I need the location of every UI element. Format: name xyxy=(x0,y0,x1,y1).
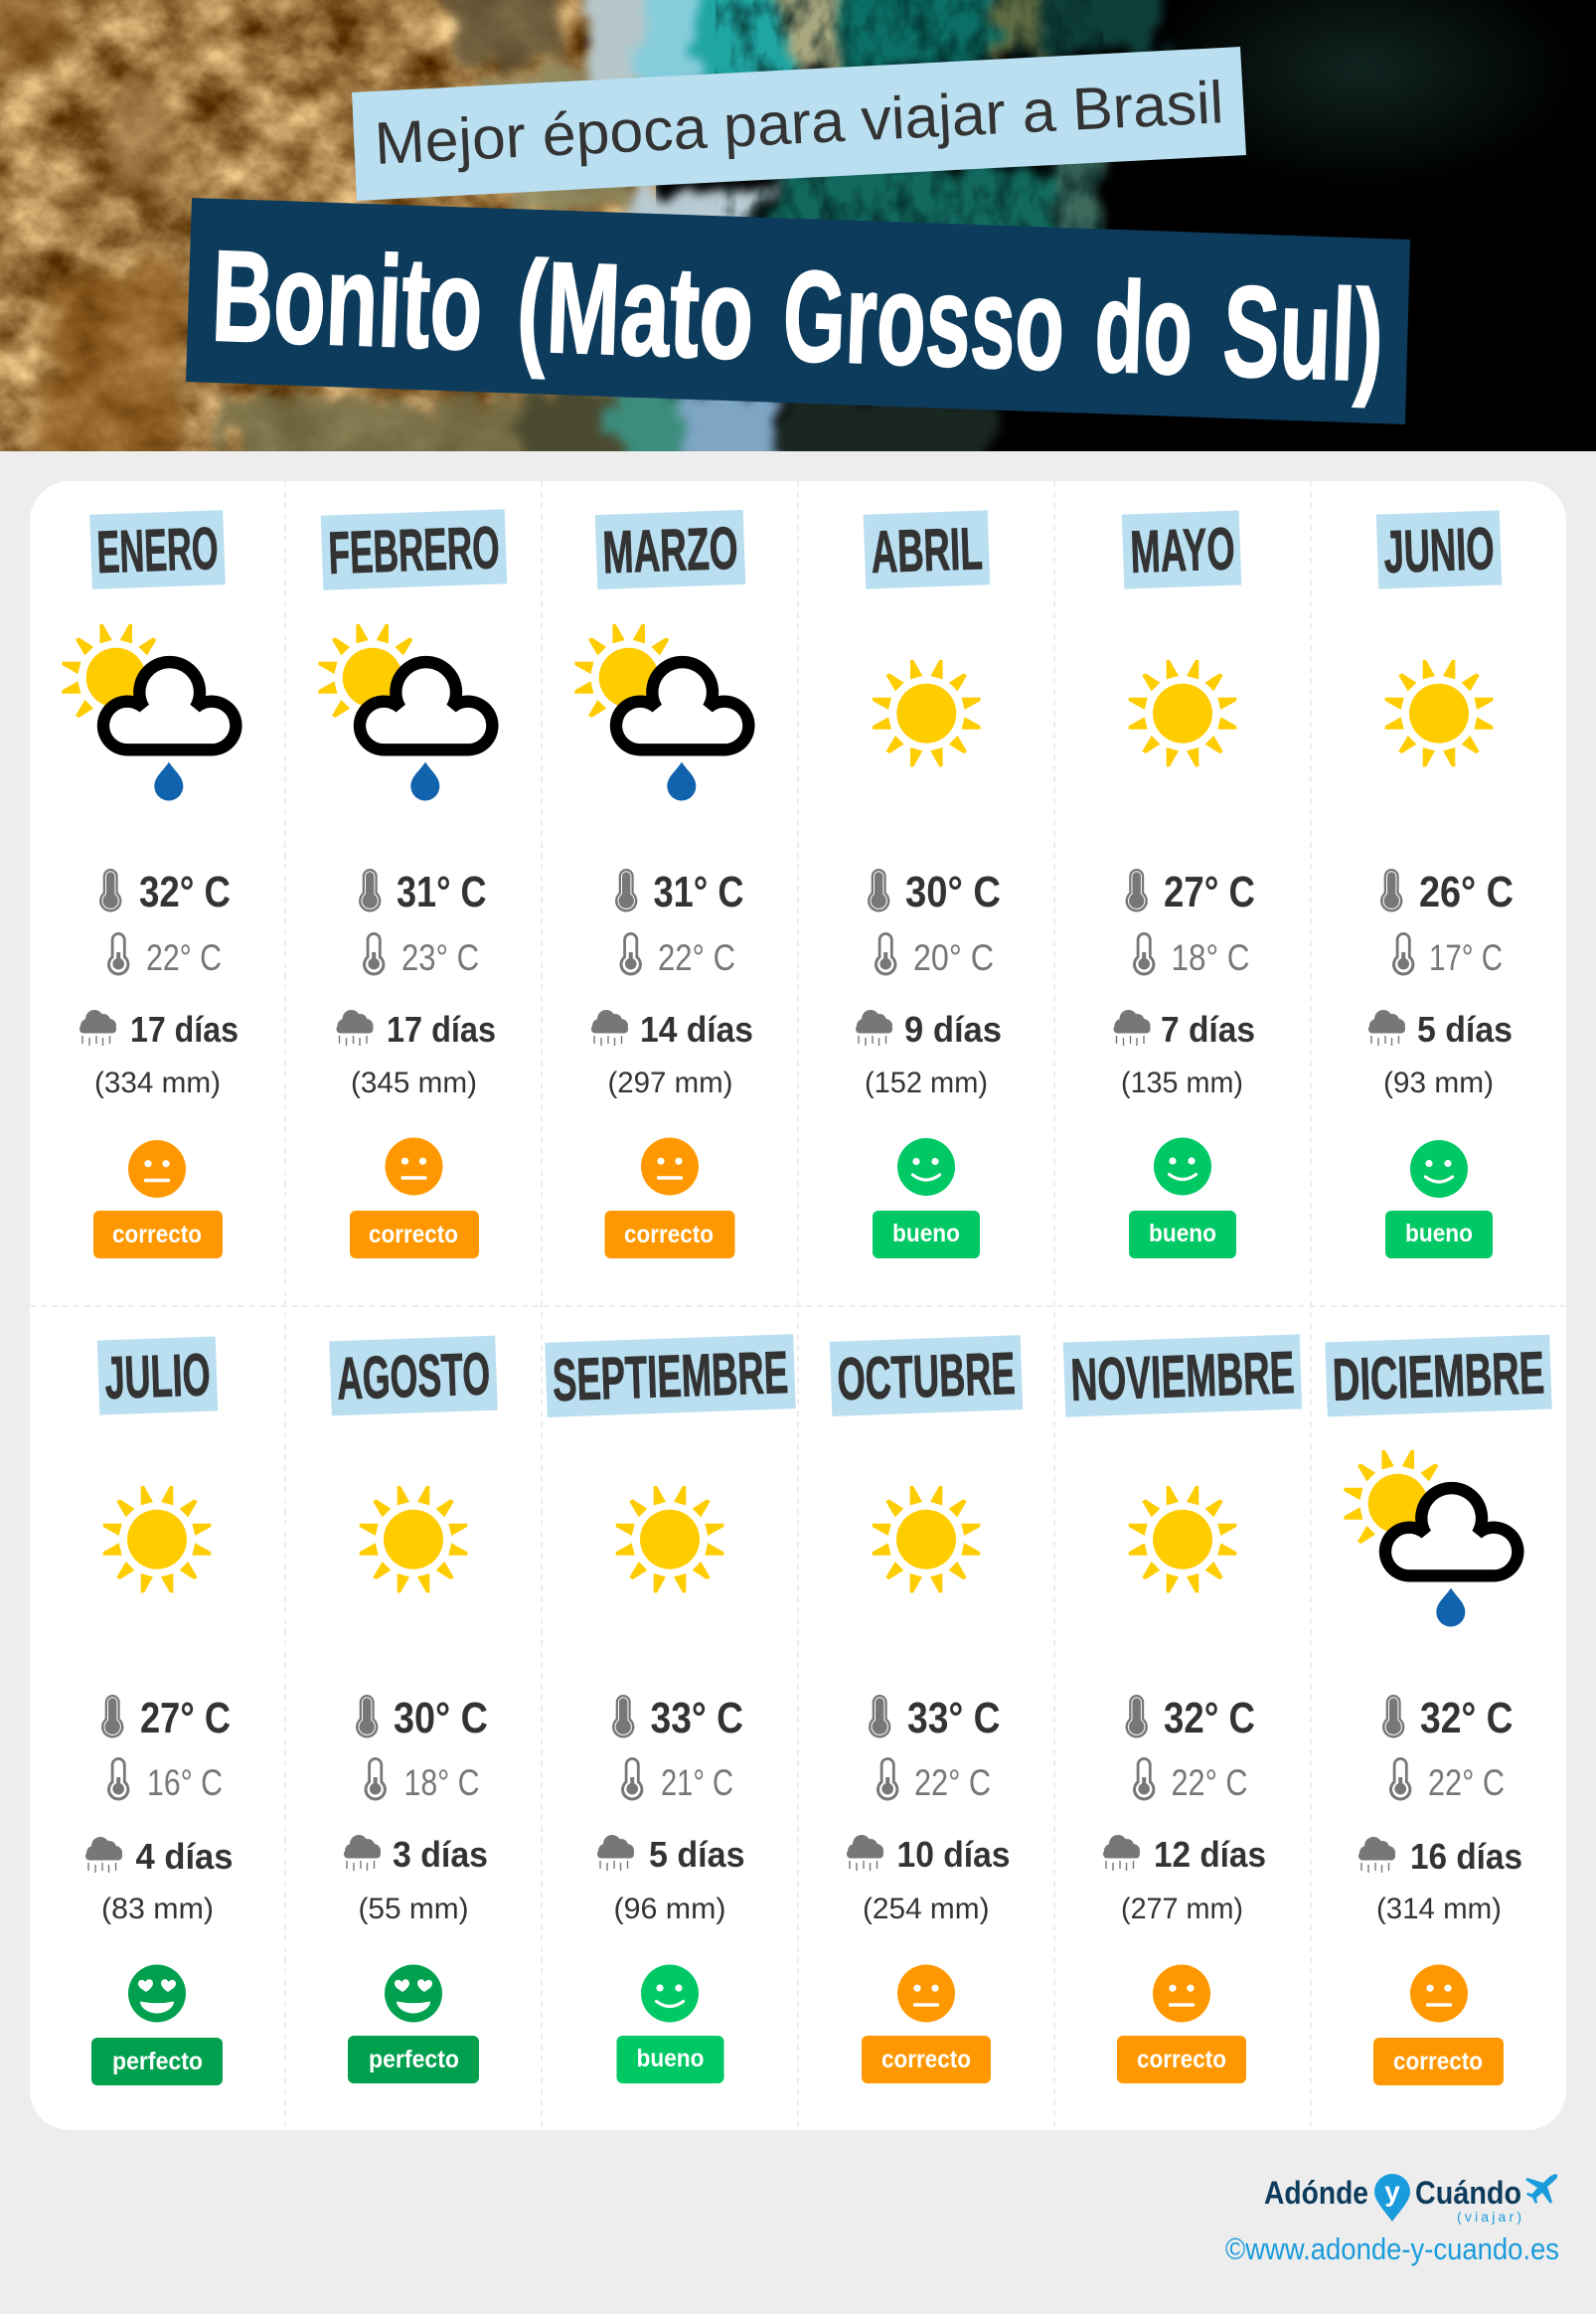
rating badge xyxy=(1373,2038,1504,2085)
rainy days: 14 días xyxy=(640,1009,753,1050)
panel: marzo xyxy=(574,510,753,1258)
rating badge: correcto xyxy=(369,1221,458,1248)
max temperature: 30° C xyxy=(394,1694,488,1742)
max temperature xyxy=(612,1694,743,1742)
icon: sun and rain cloud xyxy=(574,624,748,800)
logo: Adónde y Cuándo: Adónde xyxy=(1264,2175,1368,2211)
panel: abril xyxy=(856,510,1002,1258)
rainfall: (334 mm) xyxy=(94,1067,221,1099)
min temperature xyxy=(107,932,222,978)
title ribbon: Grosso xyxy=(781,243,1067,398)
rating badge xyxy=(862,2036,991,2083)
rainfall: (152 mm) xyxy=(865,1067,988,1099)
month label xyxy=(864,510,990,589)
icon: location pin xyxy=(1374,2174,1410,2222)
max temperature: 27° C xyxy=(1164,868,1255,916)
max temperature xyxy=(1125,1694,1255,1742)
rainy days xyxy=(856,1009,1002,1050)
rating face xyxy=(128,1964,186,2022)
title ribbon: (Mato xyxy=(515,234,756,387)
month label xyxy=(830,1335,1023,1416)
rainfall: (297 mm) xyxy=(608,1067,733,1099)
icon: location pin: y xyxy=(1384,2176,1400,2207)
rainfall: (93 mm) xyxy=(1383,1067,1494,1099)
rainy days xyxy=(85,1836,233,1877)
max temperature xyxy=(1125,868,1255,916)
logo: Adónde y Cuándo xyxy=(1264,2174,1557,2225)
title ribbon: Bonito xyxy=(210,223,485,377)
min temperature xyxy=(621,1757,733,1803)
calendar card xyxy=(30,481,1566,2130)
rainfall: (345 mm) xyxy=(351,1067,477,1099)
panel: julio xyxy=(85,1336,233,2085)
icon: plane xyxy=(1525,2174,1557,2204)
max temperature: 32° C xyxy=(1164,1694,1255,1742)
icon: sun xyxy=(1129,1486,1236,1592)
rating face xyxy=(128,1140,186,1198)
max temperature: 27° C xyxy=(140,1694,231,1742)
month label: NOVIEMBRE xyxy=(1069,1339,1296,1413)
max temperature xyxy=(356,1694,488,1742)
rainy days: 5 días xyxy=(1417,1009,1513,1050)
min temperature: 21° C xyxy=(661,1762,733,1803)
title ribbon: Sul) xyxy=(1220,258,1385,409)
rainfall: (96 mm) xyxy=(614,1893,725,1925)
rainy days: 17 días xyxy=(130,1009,239,1050)
icon: sun xyxy=(360,1486,467,1592)
rating badge xyxy=(1117,2036,1246,2083)
month label: FEBRERO xyxy=(327,514,501,586)
min temperature: 23° C xyxy=(401,937,479,978)
month label: OCTUBRE xyxy=(836,1340,1017,1412)
header photo: cave and waterfall xyxy=(0,0,1596,477)
rainy days xyxy=(336,1009,496,1050)
rating face xyxy=(641,1964,699,2022)
max temperature: 32° C xyxy=(1420,1694,1513,1742)
rainy days xyxy=(1358,1836,1522,1877)
rainy days xyxy=(1103,1834,1266,1875)
panel: febrero xyxy=(318,509,507,1258)
month label: JULIO xyxy=(103,1341,212,1411)
panel: junio xyxy=(1368,510,1514,1258)
rating badge: correcto xyxy=(1137,2046,1226,2073)
max temperature xyxy=(101,1694,231,1742)
rating face xyxy=(897,1138,955,1196)
rating badge: correcto xyxy=(624,1221,714,1248)
rainy days: 17 días xyxy=(387,1009,496,1050)
icon: sun xyxy=(1385,660,1493,766)
month label: ENERO xyxy=(95,515,220,585)
min temperature: 17° C xyxy=(1429,937,1503,978)
rating badge xyxy=(350,1211,479,1258)
min temperature: 22° C xyxy=(1171,1762,1248,1803)
rainy days xyxy=(591,1009,753,1050)
rating badge xyxy=(1385,1211,1493,1258)
max temperature xyxy=(615,868,743,916)
min temperature: 22° C xyxy=(146,937,222,978)
max temperature: 30° C xyxy=(905,868,1001,916)
max temperature xyxy=(359,868,487,916)
rating face xyxy=(1154,1137,1211,1195)
icon: sun xyxy=(1129,660,1236,766)
icon: sun and rain cloud xyxy=(62,624,236,800)
rating badge: bueno xyxy=(1405,1220,1473,1247)
max temperature xyxy=(1382,1694,1513,1742)
rating badge xyxy=(91,2038,223,2085)
rainy days: 10 días xyxy=(896,1834,1010,1875)
min temperature: 16° C xyxy=(147,1762,223,1803)
subtitle ribbon: Mejor época para viajar a Brasil xyxy=(373,69,1225,177)
subtitle ribbon xyxy=(352,47,1246,201)
min temperature: 20° C xyxy=(913,937,994,978)
rating badge: correcto xyxy=(112,1221,202,1248)
logo: Adónde y Cuándo: (viajar) xyxy=(1457,2209,1521,2225)
month label: MAYO xyxy=(1129,515,1236,585)
panel: mayo xyxy=(1113,510,1255,1258)
rating badge xyxy=(93,1211,223,1258)
min temperature xyxy=(620,932,735,978)
max temperature: 33° C xyxy=(907,1694,1000,1742)
rainfall: (314 mm) xyxy=(1376,1893,1502,1925)
rating badge: bueno xyxy=(892,1220,960,1247)
min temperature xyxy=(1133,1757,1248,1803)
rainy days xyxy=(597,1834,745,1875)
rating badge xyxy=(616,2036,723,2083)
rainy days: 7 días xyxy=(1161,1009,1255,1050)
rainy days xyxy=(80,1009,239,1050)
title ribbon xyxy=(186,198,1410,424)
rainy days: 4 días xyxy=(135,1836,233,1877)
month label: JUNIO xyxy=(1382,515,1496,585)
month label: MARZO xyxy=(601,515,739,585)
month label xyxy=(321,509,507,590)
title ribbon: do xyxy=(1092,253,1196,402)
panel: enero xyxy=(62,510,239,1258)
panel: diciembre xyxy=(1325,1335,1552,2085)
rainy days: 12 días xyxy=(1154,1834,1266,1875)
max temperature: 31° C xyxy=(397,868,487,916)
rating face xyxy=(641,1137,699,1195)
rating badge: correcto xyxy=(1393,2048,1483,2075)
icon: sun xyxy=(873,660,981,766)
rainy days: 9 días xyxy=(904,1009,1002,1050)
icon: sun xyxy=(103,1486,211,1592)
max temperature xyxy=(1380,868,1514,916)
month label xyxy=(1063,1334,1302,1417)
rating face xyxy=(1410,1140,1468,1198)
rating badge: correcto xyxy=(881,2046,971,2073)
panel: agosto xyxy=(329,1336,498,2083)
icon: sun xyxy=(873,1486,980,1592)
min temperature xyxy=(1392,932,1503,978)
rating face xyxy=(385,1964,442,2022)
rating face xyxy=(897,1964,955,2022)
month label xyxy=(1376,510,1502,589)
rainy days xyxy=(344,1834,488,1875)
rating badge: bueno xyxy=(636,2045,704,2072)
month label: ABRIL xyxy=(870,515,984,585)
month label: SEPTIEMBRE xyxy=(552,1339,789,1413)
month label xyxy=(329,1336,498,1415)
panel: octubre xyxy=(830,1335,1023,2083)
rainy days xyxy=(847,1834,1010,1875)
logo: Adónde y Cuándo: Cuándo xyxy=(1415,2175,1521,2211)
rating badge: perfecto xyxy=(369,2046,459,2073)
rainfall: (55 mm) xyxy=(358,1893,469,1925)
rainy days: 16 días xyxy=(1410,1836,1522,1877)
min temperature: 22° C xyxy=(1428,1762,1505,1803)
rating badge: bueno xyxy=(1149,1220,1216,1247)
rating badge xyxy=(604,1211,735,1258)
rating badge xyxy=(1129,1211,1236,1258)
max temperature xyxy=(99,868,231,916)
month label xyxy=(89,510,226,589)
icon: sun and rain cloud xyxy=(1344,1450,1517,1626)
rating face xyxy=(1153,1964,1210,2022)
max temperature: 26° C xyxy=(1419,868,1514,916)
rating badge xyxy=(873,1211,980,1258)
min temperature xyxy=(875,932,994,978)
website credit: ©www.adonde-y-cuando.es xyxy=(1225,2231,1559,2266)
rainy days xyxy=(1368,1009,1513,1050)
min temperature xyxy=(107,1757,223,1803)
month label xyxy=(595,510,745,589)
min temperature: 22° C xyxy=(658,937,735,978)
rainfall: (254 mm) xyxy=(863,1893,990,1925)
max temperature: 31° C xyxy=(654,868,743,916)
min temperature: 22° C xyxy=(914,1762,991,1803)
min temperature: 18° C xyxy=(403,1762,479,1803)
max temperature xyxy=(869,1694,1000,1742)
panel: noviembre xyxy=(1063,1334,1302,2083)
rainfall: (277 mm) xyxy=(1121,1893,1243,1925)
rainy days xyxy=(1113,1009,1255,1050)
rainfall: (135 mm) xyxy=(1121,1067,1243,1099)
max temperature xyxy=(868,868,1001,916)
rainfall: (83 mm) xyxy=(101,1893,214,1925)
min temperature xyxy=(363,932,479,978)
min temperature xyxy=(877,1757,991,1803)
min temperature: 18° C xyxy=(1171,937,1250,978)
min temperature xyxy=(364,1757,479,1803)
month label xyxy=(545,1334,796,1417)
panel: septiembre xyxy=(545,1334,796,2083)
min temperature xyxy=(1133,932,1250,978)
max temperature: 33° C xyxy=(650,1694,743,1742)
rainy days: 3 días xyxy=(393,1834,488,1875)
icon: sun and rain cloud xyxy=(318,624,492,800)
rating face xyxy=(1410,1964,1468,2022)
rating badge xyxy=(348,2036,479,2083)
rainy days: 5 días xyxy=(649,1834,745,1875)
max temperature: 32° C xyxy=(139,868,231,916)
min temperature xyxy=(1389,1757,1505,1803)
month label xyxy=(1122,510,1241,589)
month label: AGOSTO xyxy=(336,1340,491,1412)
icon: sun xyxy=(616,1486,723,1592)
rating badge: perfecto xyxy=(112,2048,203,2075)
month label xyxy=(97,1336,218,1415)
rating face xyxy=(386,1137,443,1195)
